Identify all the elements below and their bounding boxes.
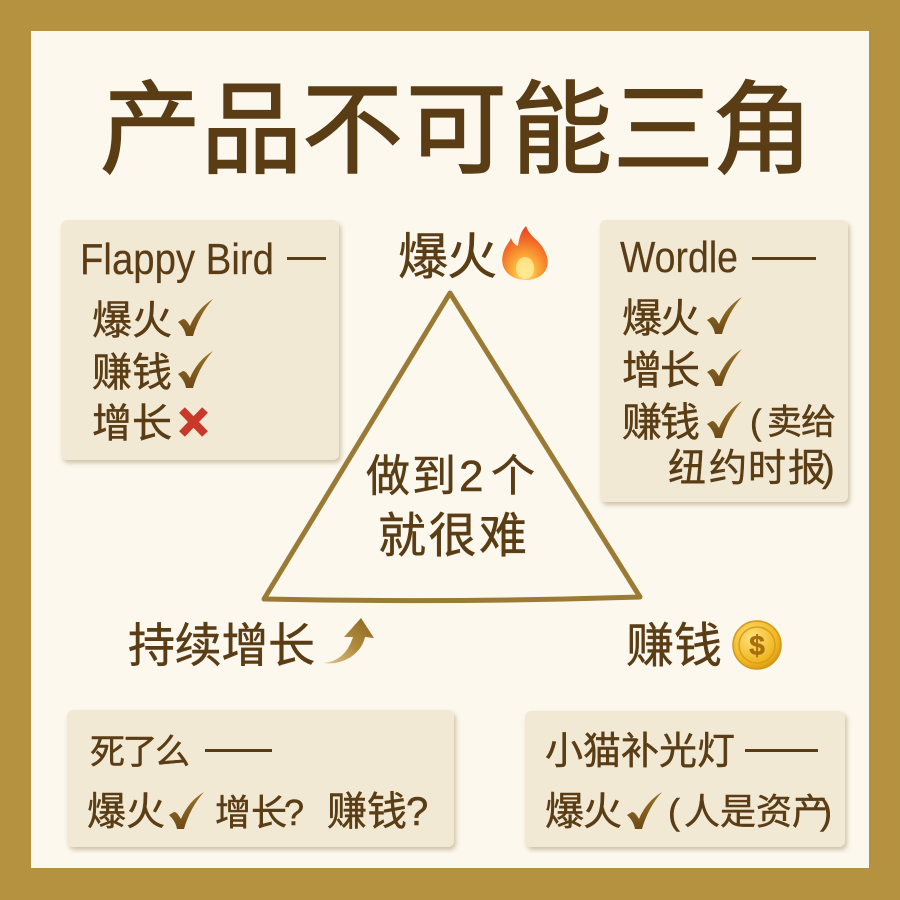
panel: Flappy Bird: 增长 bbox=[92, 402, 172, 446]
triangle bbox=[264, 293, 640, 601]
panel: 小猫补光灯: (人是资产) bbox=[668, 791, 832, 832]
panel: Flappy Bird: 赚钱 bbox=[92, 351, 172, 395]
panel: Wordle bbox=[600, 220, 848, 502]
panel: Wordle: Wordle bbox=[620, 233, 738, 282]
label: viral: 爆火 bbox=[398, 229, 497, 285]
panel: Wordle: 增长 bbox=[622, 349, 700, 393]
label: sustained growth: 持续增长 bbox=[128, 619, 315, 672]
icon: growth arrow bbox=[323, 618, 374, 663]
panel: Flappy Bird: Flappy Bird bbox=[80, 235, 274, 284]
panel: Wordle: 纽约时报) bbox=[668, 448, 835, 490]
panel: 小猫补光灯 bbox=[525, 711, 845, 847]
panel: 死了么: 赚钱? bbox=[327, 790, 428, 834]
panel: Flappy Bird: 爆火 bbox=[92, 299, 172, 343]
panel: 小猫补光灯: 爆火 bbox=[545, 791, 622, 834]
panel: Wordle: 赚钱 bbox=[622, 401, 700, 445]
panel: 死了么: 死了么 bbox=[90, 733, 190, 772]
panel: Flappy Bird bbox=[61, 220, 339, 460]
triangle center text: 做到2个 bbox=[366, 452, 535, 501]
icon: coin: $ bbox=[749, 630, 765, 661]
panel: 死了么: 增长? bbox=[215, 792, 304, 833]
panel: 小猫补光灯: 小猫补光灯 bbox=[545, 731, 735, 773]
label: money: 赚钱 bbox=[626, 620, 722, 673]
panel: 死了么 bbox=[67, 710, 454, 847]
panel: Wordle: (卖给 bbox=[750, 403, 836, 442]
triangle center text: 就很难 bbox=[378, 510, 527, 563]
icon: coin bbox=[733, 621, 781, 669]
panel: 死了么: 爆火 bbox=[87, 791, 165, 834]
panel: Wordle: 爆火 bbox=[622, 297, 700, 341]
title: 产品不可能三角 bbox=[100, 75, 813, 187]
triangle center text bbox=[366, 452, 535, 563]
icon: fire bbox=[502, 226, 548, 280]
